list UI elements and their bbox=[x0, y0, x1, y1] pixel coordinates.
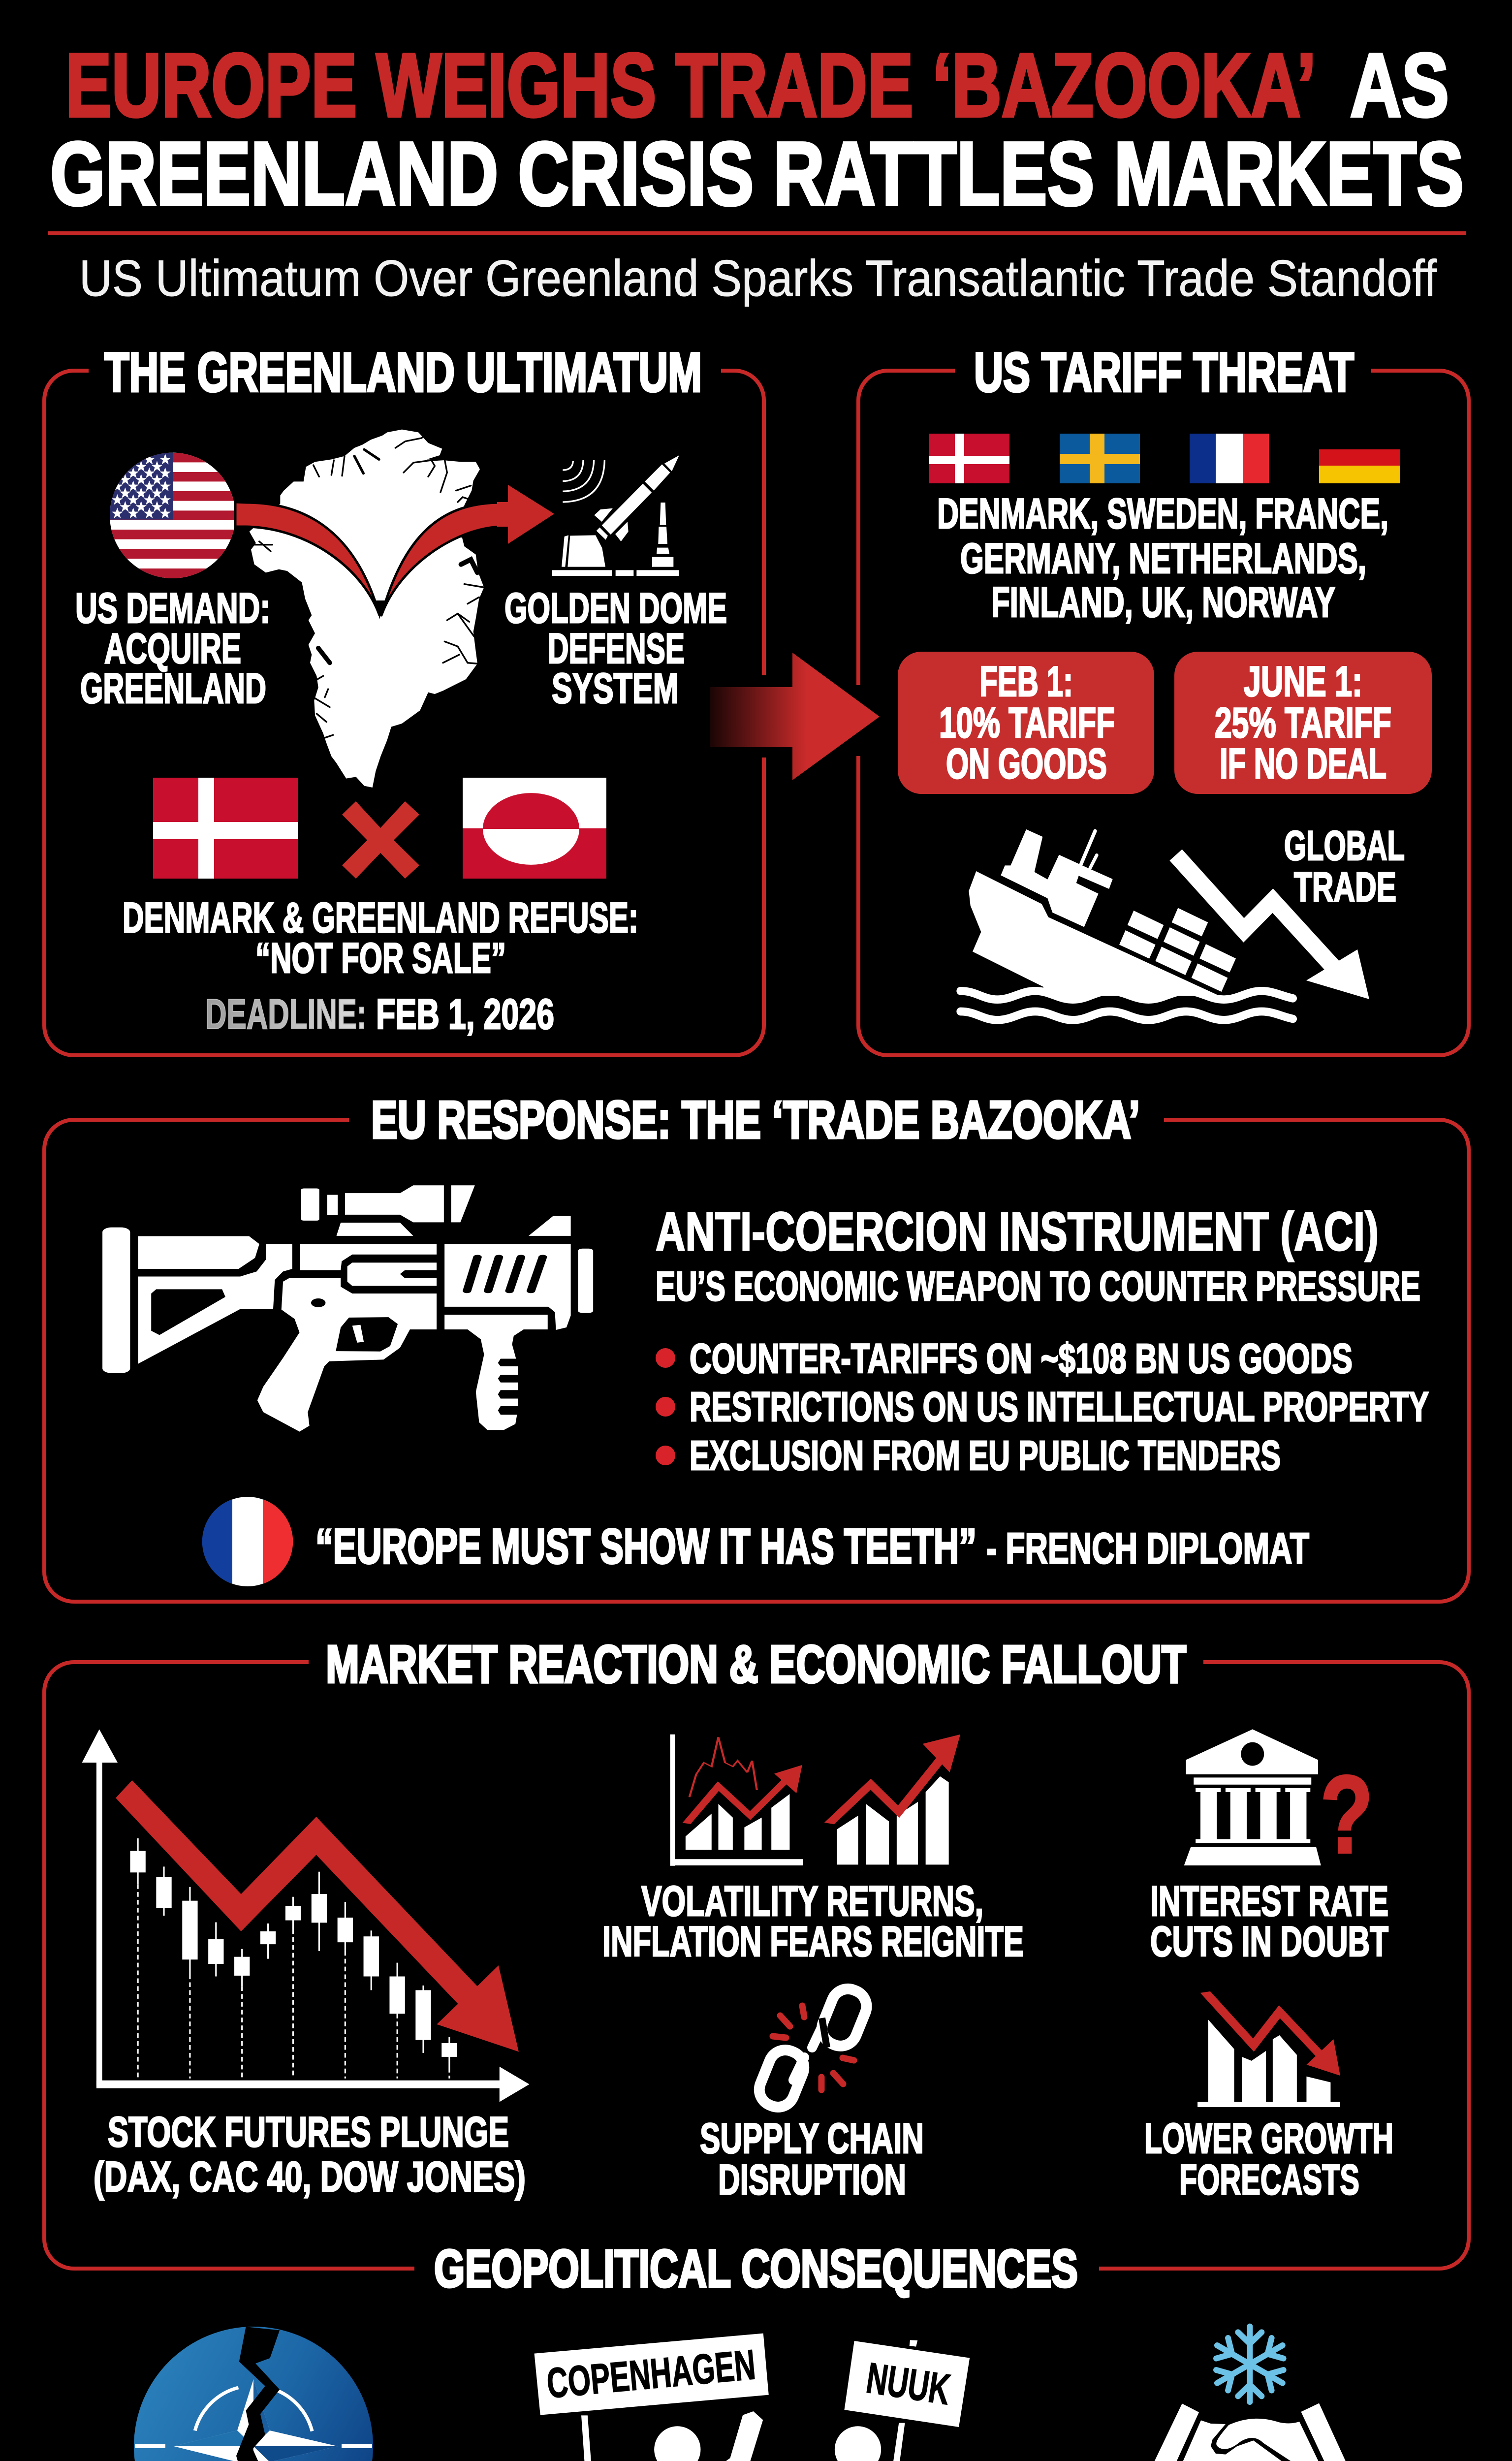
quote: french diplomat: - FRENCH DIPLOMAT bbox=[986, 1524, 1309, 1573]
label: lower growth forecasts: FORECASTS bbox=[1179, 2156, 1359, 2204]
icon: broken chain bbox=[755, 1984, 872, 2112]
list: aci measures: EXCLUSION FROM EU PUBLIC TENDERS bbox=[690, 1432, 1281, 1479]
label: volatility returns: VOLATILITY RETURNS, bbox=[641, 1878, 983, 1925]
icon: four country flags bbox=[929, 434, 1400, 483]
text: deadline: FEB 1, 2026 bbox=[376, 991, 554, 1038]
icon: fractured nato emblem bbox=[134, 2327, 373, 2461]
icon: trade bazooka weapon bbox=[102, 1185, 593, 1432]
heading: geopolitical consequences: GEOPOLITICAL CONSEQUENCES bbox=[434, 2239, 1078, 2298]
icon: us flag bbox=[108, 451, 238, 581]
heading: eu response: EU RESPONSE: THE ‘TRADE BAZOOKA’ bbox=[371, 1090, 1140, 1149]
arrow: us demand through greenland to golden dome bbox=[235, 485, 554, 619]
arrow: from ultimatum to tariff threat bbox=[710, 653, 880, 780]
icon: snowflake bbox=[1211, 2327, 1289, 2402]
text: deadline: DEADLINE: bbox=[205, 991, 367, 1038]
label: golden dome defense system bbox=[504, 585, 727, 712]
label: interest rate cuts bbox=[1150, 1878, 1388, 1965]
text: targeted countries: FINLAND, UK, NORWAY bbox=[991, 579, 1335, 626]
icon: golden dome missile bbox=[552, 455, 679, 576]
text: deadline bbox=[205, 991, 554, 1038]
callout: june 1 tariff: 25% TARIFF bbox=[1215, 699, 1391, 747]
label: us demand: GREENLAND bbox=[80, 665, 266, 712]
heading: market reaction: MARKET REACTION & ECONOMIC FALLOUT bbox=[326, 1634, 1186, 1694]
icon: french flag circle bbox=[202, 1497, 293, 1586]
list: aci measures bbox=[656, 1335, 1429, 1479]
label: us demand: US DEMAND: bbox=[75, 585, 270, 632]
callout: feb 1 tariff: FEB 1: bbox=[979, 658, 1073, 705]
label: lower growth forecasts bbox=[1144, 2115, 1393, 2204]
text: refusal: DENMARK & GREENLAND REFUSE: bbox=[123, 894, 638, 942]
text: refusal bbox=[123, 894, 638, 982]
label: us demand: ACQUIRE bbox=[104, 625, 241, 672]
callout: feb 1 tariff: 10% TARIFF bbox=[939, 699, 1115, 747]
icon: greenland flag bbox=[463, 778, 606, 879]
label: lower growth forecasts: LOWER GROWTH bbox=[1144, 2115, 1393, 2162]
title: AS bbox=[1350, 34, 1449, 135]
label: global trade bbox=[1284, 822, 1405, 910]
panel: the greenland ultimatum bbox=[44, 342, 764, 1055]
chart: stock futures candlesticks bbox=[82, 1729, 529, 2102]
icon: central bank with question mark bbox=[1184, 1729, 1373, 1876]
title bbox=[50, 34, 1464, 224]
callout: june 1 tariff: JUNE 1: bbox=[1244, 658, 1362, 705]
icon: red x bbox=[342, 801, 419, 879]
panel: eu response bbox=[44, 1090, 1469, 1602]
label: volatility returns bbox=[602, 1878, 1024, 1965]
heading: us tariff threat: US TARIFF THREAT bbox=[974, 342, 1354, 403]
icon: protesters with signs bbox=[535, 2334, 970, 2461]
callout: june 1 tariff bbox=[1174, 652, 1432, 794]
label: golden dome defense system: GOLDEN DOME bbox=[504, 585, 727, 632]
icon: denmark flag bbox=[153, 778, 298, 879]
text: targeted countries: GERMANY, NETHERLANDS, bbox=[960, 535, 1366, 582]
icon: sinking cargo ship bbox=[961, 829, 1293, 1020]
label: interest rate cuts: INTEREST RATE bbox=[1150, 1878, 1388, 1925]
panel: us tariff threat bbox=[858, 342, 1469, 1055]
label: volatility returns: INFLATION FEARS REIGNITE bbox=[602, 1918, 1024, 1965]
callout: june 1 tariff: IF NO DEAL bbox=[1220, 740, 1386, 788]
callout: feb 1 tariff: ON GOODS bbox=[946, 740, 1107, 788]
label: us demand bbox=[75, 585, 270, 712]
label: global trade: GLOBAL bbox=[1284, 822, 1405, 869]
sign text: copenhagen: COPENHAGEN bbox=[545, 2341, 757, 2407]
label: stock futures plunge bbox=[94, 2109, 526, 2201]
icon: lower growth chart bbox=[1197, 1992, 1340, 2107]
text: refusal: “NOT FOR SALE” bbox=[255, 935, 506, 982]
quote: french diplomat: “EUROPE MUST SHOW IT HAS TEETH” bbox=[315, 1519, 976, 1574]
label: global trade: TRADE bbox=[1294, 864, 1396, 910]
text: anti-coercion instrument bbox=[656, 1201, 1420, 1309]
text: targeted countries bbox=[937, 490, 1388, 626]
callout: feb 1 tariff bbox=[898, 652, 1154, 794]
label: stock futures plunge: STOCK FUTURES PLUNGE bbox=[108, 2109, 509, 2156]
heading: the greenland ultimatum: THE GREENLAND ULTIMATUM bbox=[104, 342, 702, 403]
label: supply chain disruption: DISRUPTION bbox=[718, 2156, 906, 2204]
label: golden dome defense system: DEFENSE bbox=[548, 625, 685, 672]
label: supply chain disruption bbox=[700, 2115, 924, 2204]
sign text: nuuk: NUUK bbox=[863, 2353, 953, 2414]
label: stock futures plunge: (DAX, CAC 40, DOW JONES) bbox=[94, 2153, 526, 2201]
label: interest rate cuts: CUTS IN DOUBT bbox=[1150, 1918, 1388, 1965]
icon: volatility charts bbox=[670, 1735, 960, 1866]
icon: global trade falling arrow bbox=[1176, 855, 1369, 999]
label: supply chain disruption: SUPPLY CHAIN bbox=[700, 2115, 924, 2162]
icon: frozen handshake bbox=[1154, 2327, 1346, 2461]
icon: central bank with question mark: ? bbox=[1320, 1752, 1373, 1876]
panel: market reaction bbox=[44, 1634, 1469, 2269]
icon: greenland map bbox=[250, 430, 484, 788]
label: golden dome defense system: SYSTEM bbox=[552, 665, 679, 712]
